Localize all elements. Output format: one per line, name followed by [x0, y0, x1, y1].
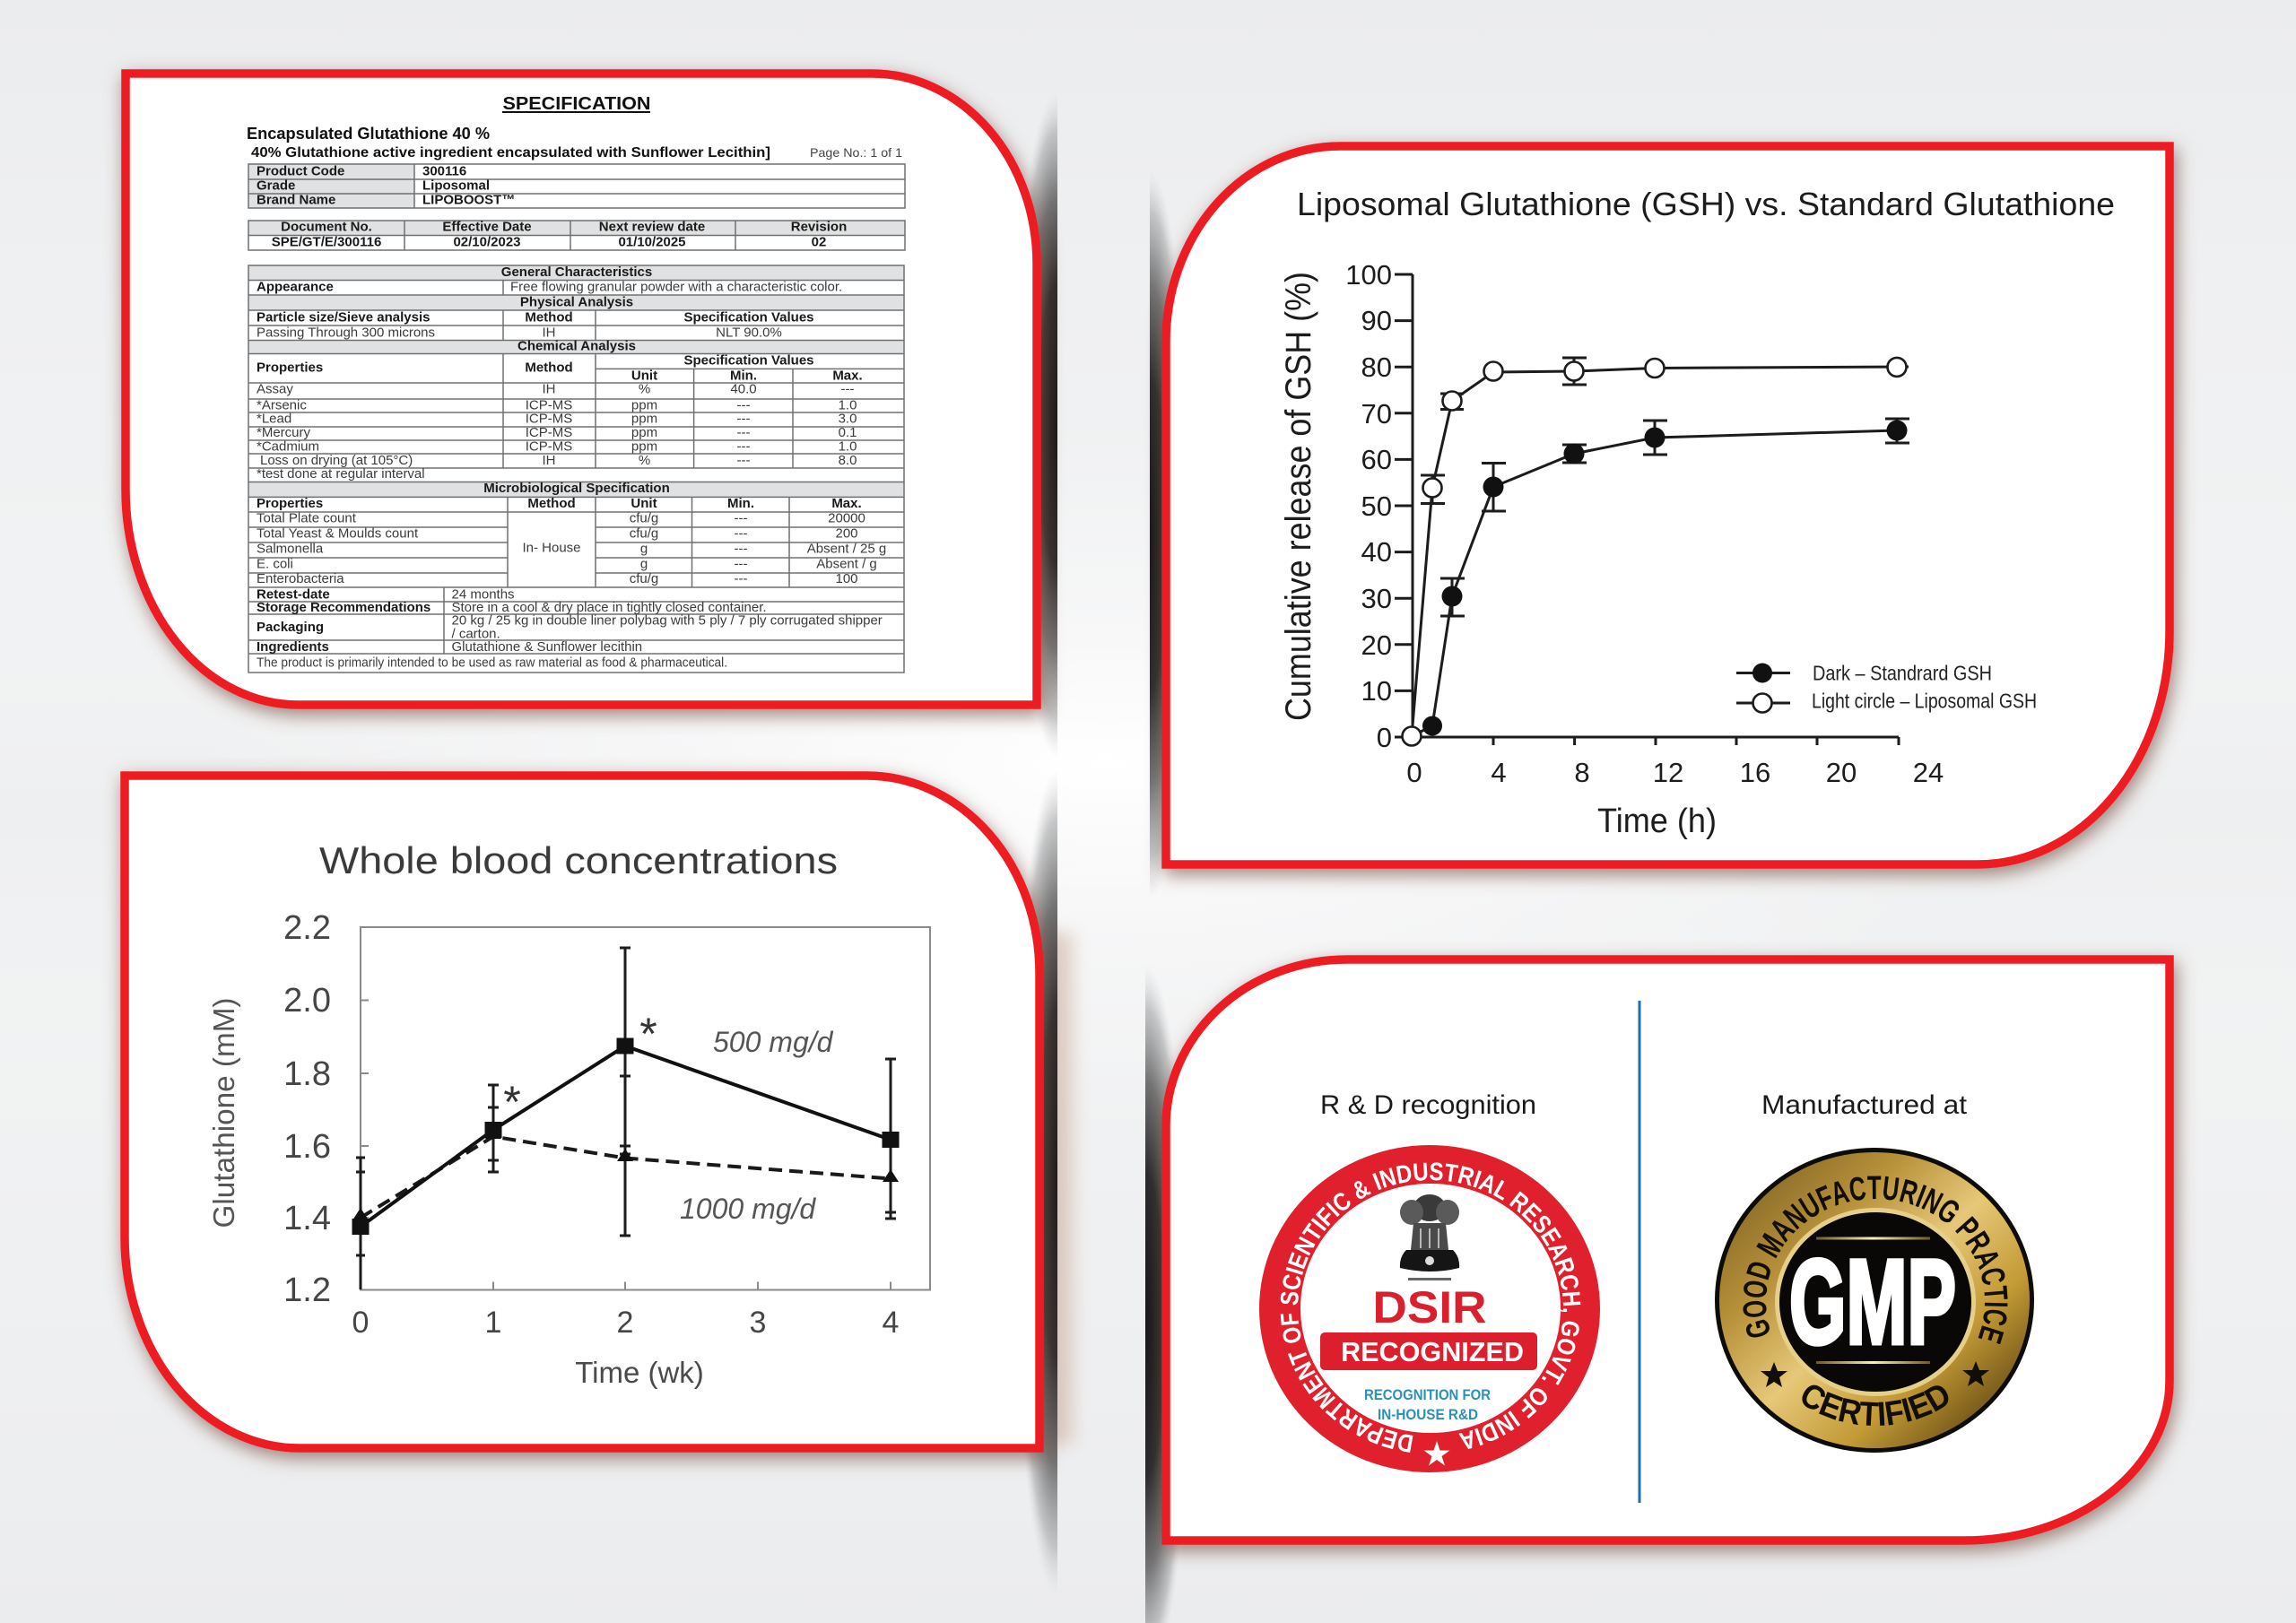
table: characteristics and analysis: ---: [737, 453, 750, 468]
star: [1424, 1441, 1449, 1465]
y axis labels: 1.2: [283, 1271, 331, 1309]
y axis title: Glutathione (mM): [207, 997, 240, 1228]
table: characteristics and analysis: g: [640, 542, 648, 556]
stars: [1761, 1361, 1989, 1387]
significance marks: *: [503, 1077, 521, 1127]
table: characteristics and analysis: ---: [737, 398, 750, 412]
x axis labels: 2: [617, 1306, 633, 1340]
gold rules: [1816, 1237, 1930, 1239]
table: characteristics and analysis: ---: [734, 511, 748, 525]
x axis labels: [1406, 757, 1944, 788]
table: characteristics and analysis: Loss on drying (at 105°C): [260, 453, 413, 468]
warm glow beside lower left panel: [1045, 933, 1074, 1444]
table: characteristics and analysis: 100: [835, 571, 858, 586]
product description: 40% Glutathione active ingredient encapsulated with Sunflower Lecithin]: [251, 145, 770, 161]
table: product identity: Brand Name: [257, 192, 335, 208]
table: characteristics and analysis: Appearance: [257, 280, 334, 294]
y axis labels: [1345, 259, 1392, 753]
table: characteristics and analysis: Total Plate count: [257, 511, 357, 525]
table: characteristics and analysis: Particle size/Sieve analysis: [257, 310, 430, 325]
table: characteristics and analysis: Method: [525, 360, 573, 375]
x axis labels: 24: [1913, 757, 1944, 788]
table: product identity: [248, 163, 905, 208]
table: characteristics and analysis: Passing Through 300 microns: [257, 325, 435, 341]
DSIR text: DSIR: [1372, 1282, 1487, 1332]
table: characteristics and analysis: Enterobacteria: [257, 571, 344, 586]
panel: whole blood concentrations: [125, 776, 1039, 1448]
table: characteristics and analysis: Salmonella: [257, 542, 324, 556]
significance marks: [503, 1009, 657, 1127]
table: characteristics and analysis: cfu/g: [630, 511, 658, 525]
series label: 1000 mg/d: 1000 mg/d: [680, 1193, 816, 1225]
table: characteristics and analysis: %: [639, 453, 650, 468]
table: characteristics and analysis: / carton.: [452, 626, 500, 642]
table: document control: Revision: [791, 219, 847, 235]
table: characteristics and analysis: Max.: [832, 368, 863, 384]
chart title: Whole blood concentrations: [319, 839, 838, 881]
heading: specification: SPECIFICATION: [502, 94, 651, 114]
table: characteristics and analysis: ---: [737, 425, 750, 440]
table: characteristics and analysis: 1.0: [839, 398, 857, 412]
table: characteristics and analysis: ppm: [631, 398, 657, 412]
table: characteristics and analysis: 0.1: [839, 425, 857, 440]
table: characteristics and analysis: ---: [737, 439, 750, 454]
table: document control: 02/10/2023: [453, 235, 521, 249]
ring text: GOOD MANUFACTURING PRACTICE: [1743, 1176, 2008, 1345]
table: characteristics and analysis: ppm: [631, 425, 657, 440]
certified text: CERTIFIED: [1802, 1384, 1948, 1426]
table: characteristics and analysis: ---: [734, 525, 748, 542]
y axis labels: 60: [1361, 444, 1392, 475]
table: characteristics and analysis: ICP-MS: [526, 411, 572, 427]
y axis labels: 30: [1361, 583, 1392, 614]
x axis labels: [352, 1306, 899, 1340]
y axis labels: 1.4: [283, 1200, 331, 1237]
y axis labels: 70: [1361, 398, 1392, 430]
y axis labels: 40: [1361, 536, 1392, 568]
ring text: DEPARTMENT OF SCIENTIFIC & INDUSTRIAL RESEARCH, GOVT. OF INDIA: [1281, 1162, 1580, 1453]
table: characteristics and analysis: 20000: [828, 511, 865, 525]
table: characteristics and analysis: *Arsenic: [257, 398, 307, 412]
table: characteristics and analysis: Store in a cool & dry place in tightly closed container.: [452, 600, 767, 615]
series: 1000 mg/d dashed: [352, 1126, 899, 1220]
table: characteristics and analysis: Retest-date: [257, 586, 330, 603]
y axis labels: 2.2: [283, 909, 331, 947]
table: characteristics and analysis: IH: [542, 382, 556, 396]
badge: GMP certified: [1715, 1148, 2034, 1453]
recognized banner: RECOGNIZED: [1341, 1336, 1524, 1367]
table: characteristics and analysis: ppm: [631, 439, 657, 454]
x axis labels: 8: [1574, 757, 1590, 788]
table: characteristics and analysis: ---: [841, 382, 854, 396]
table: characteristics and analysis: 200: [835, 525, 858, 542]
table: characteristics and analysis: Method: [527, 496, 576, 511]
table: characteristics and analysis: Microbiological Specification: [483, 481, 670, 496]
table: characteristics and analysis: Packaging: [257, 620, 324, 635]
table: characteristics and analysis: *test done at regular interval: [257, 466, 425, 482]
table: characteristics and analysis: Chemical Analysis: [517, 339, 636, 353]
y axis labels: 20: [1361, 629, 1392, 661]
y axis title: Cumulative release of GSH (%): [1279, 272, 1318, 721]
badge: DSIR recognized: [1259, 1145, 1600, 1472]
icon: national emblem: [1400, 1194, 1459, 1280]
table: document control: Next review date: [599, 219, 705, 235]
table: characteristics and analysis: cfu/g: [630, 525, 658, 542]
axes and ticks: [1395, 274, 1899, 745]
table: characteristics and analysis: ---: [737, 411, 750, 427]
line chart: cumulative release: [1279, 259, 2037, 840]
table: characteristics and analysis: ICP-MS: [526, 425, 572, 440]
legend: Light circle – Liposomal GSH: [1812, 689, 2037, 712]
table: characteristics and analysis: General Characteristics: [501, 265, 652, 280]
table: characteristics and analysis: 20 kg / 25 kg in double liner polybag with 5 ply / 7 ply corrugated shipper: [452, 613, 883, 628]
panel: release comparison: [1166, 146, 2170, 864]
table: characteristics and analysis: NLT 90.0%: [716, 325, 782, 341]
error bars: [356, 948, 896, 1289]
y axis labels: [283, 909, 331, 1309]
y axis labels: 90: [1361, 305, 1392, 336]
table: characteristics and analysis: Absent / g: [816, 556, 877, 572]
product name: Encapsulated Glutathione 40 %: [247, 125, 490, 143]
table: characteristics and analysis: Unit: [631, 368, 657, 384]
GMP text: GMP: [1789, 1236, 1956, 1369]
table: characteristics and analysis: 40.0: [730, 382, 757, 396]
table: characteristics and analysis: Physical Analysis: [520, 294, 633, 310]
table: characteristics and analysis: IH: [542, 453, 556, 468]
table: product identity: Product Code: [257, 163, 344, 179]
table: characteristics and analysis: ppm: [631, 411, 657, 427]
series label: 500 mg/d: 500 mg/d: [713, 1026, 834, 1058]
heading: R and D recognition: R & D recognition: [1320, 1090, 1536, 1120]
table: document control: [248, 219, 905, 250]
table: characteristics and analysis: Glutathione & Sunflower lecithin: [452, 639, 642, 655]
divider: [1638, 1001, 1641, 1503]
vertical shadow streaks: [1013, 91, 1190, 1623]
table: characteristics and analysis: cfu/g: [630, 571, 658, 586]
y axis labels: 1.8: [283, 1055, 331, 1093]
chart title: Liposomal Glutathione (GSH) vs. Standard Glutathione: [1297, 186, 2115, 222]
x axis labels: 16: [1740, 757, 1770, 788]
x axis labels: 1: [485, 1306, 501, 1340]
table: characteristics and analysis: Method: [525, 310, 573, 325]
line chart: glutathione over time: [207, 909, 930, 1389]
series: 500 mg/d solid: [352, 1038, 899, 1235]
x axis labels: 4: [883, 1306, 899, 1340]
table: characteristics and analysis: ICP-MS: [526, 439, 572, 454]
significance marks: *: [639, 1009, 657, 1059]
y axis labels: 1.6: [283, 1128, 331, 1166]
x axis title: Time (h): [1597, 803, 1717, 840]
series: standard GSH: [1412, 419, 1909, 736]
plot frame and ticks: [361, 927, 930, 1289]
table: product identity: 300116: [422, 163, 466, 179]
table: characteristics and analysis: 3.0: [839, 411, 857, 427]
table: product identity: LIPOBOOST™: [422, 192, 515, 208]
x axis labels: 12: [1653, 757, 1683, 788]
x axis labels: 4: [1491, 757, 1507, 788]
table: characteristics and analysis: Total Yeast & Moulds count: [257, 525, 419, 542]
table: characteristics and analysis: Assay: [257, 382, 293, 396]
x axis title: Time (wk): [575, 1356, 704, 1389]
x axis labels: 20: [1826, 757, 1857, 788]
table: document control: Effective Date: [442, 219, 532, 235]
heading: manufactured at: Manufactured at: [1761, 1090, 1968, 1120]
x axis labels: 0: [1406, 757, 1422, 788]
table: characteristics and analysis: g: [640, 556, 648, 572]
y axis labels: 10: [1361, 675, 1392, 707]
table: characteristics and analysis: Specification Values: [683, 310, 814, 325]
table: document control: Document No.: [281, 219, 372, 235]
y axis labels: 2.0: [283, 982, 331, 1020]
table: characteristics and analysis: 24 months: [452, 586, 515, 603]
table: characteristics and analysis: ---: [734, 571, 748, 586]
table: characteristics and analysis: [248, 265, 904, 673]
table: characteristics and analysis: Properties: [257, 360, 323, 375]
x axis labels: 0: [352, 1306, 369, 1340]
table: characteristics and analysis: Unit: [631, 496, 657, 511]
table: characteristics and analysis: *Lead: [257, 411, 291, 427]
recognition caption: IN-HOUSE R&D: [1378, 1406, 1478, 1423]
y axis labels: 50: [1361, 490, 1392, 522]
table: characteristics and analysis: *Cadmium: [257, 439, 319, 454]
table: document control: 02: [812, 235, 826, 249]
table: characteristics and analysis: ICP-MS: [526, 398, 572, 412]
recognition caption: [1364, 1386, 1491, 1423]
table: product identity: Liposomal: [422, 178, 490, 194]
table: characteristics and analysis: Min.: [727, 496, 754, 511]
legend: Dark – Standrard GSH: [1813, 662, 1992, 685]
table: characteristics and analysis: Min.: [730, 368, 757, 384]
table: characteristics and analysis: Storage Recommendations: [257, 600, 430, 615]
y axis labels: 0: [1377, 722, 1392, 753]
panel: certifications: [1154, 949, 2188, 1564]
table: characteristics and analysis: 8.0: [839, 453, 857, 468]
table: characteristics and analysis: Ingredients: [257, 639, 329, 655]
table: characteristics and analysis: *Mercury: [257, 425, 311, 440]
table: characteristics and analysis: Free flowing granular powder with a characteristic color.: [510, 280, 842, 294]
recognition caption: RECOGNITION FOR: [1364, 1386, 1491, 1403]
table: product identity: Grade: [257, 178, 295, 194]
table: characteristics and analysis: Max.: [831, 496, 862, 511]
legend: [1736, 662, 2037, 712]
table: document control: 01/10/2025: [618, 235, 686, 249]
x axis labels: 3: [750, 1306, 766, 1340]
table: characteristics and analysis: Absent / 25 g: [807, 542, 886, 556]
table: characteristics and analysis: %: [639, 382, 650, 396]
table: characteristics and analysis: In- House: [522, 540, 581, 556]
y axis labels: 100: [1345, 259, 1392, 291]
y axis labels: 80: [1361, 352, 1392, 383]
table: characteristics and analysis: Properties: [257, 496, 323, 511]
series: liposomal GSH: [1403, 358, 1909, 746]
page number: Page No.: 1 of 1: [810, 145, 902, 160]
table: characteristics and analysis: The product is primarily intended to be used as raw material as food & pharmaceutical.: [257, 655, 727, 671]
table: characteristics and analysis: ---: [734, 542, 748, 556]
table: characteristics and analysis: Specification Values: [683, 353, 814, 368]
table: document control: SPE/GT/E/300116: [272, 235, 381, 249]
table: characteristics and analysis: 1.0: [839, 439, 857, 454]
table: characteristics and analysis: IH: [542, 325, 556, 341]
panel: specification sheet: [126, 74, 1037, 705]
table: characteristics and analysis: ---: [734, 556, 748, 572]
table: characteristics and analysis: E. coli: [257, 556, 293, 572]
